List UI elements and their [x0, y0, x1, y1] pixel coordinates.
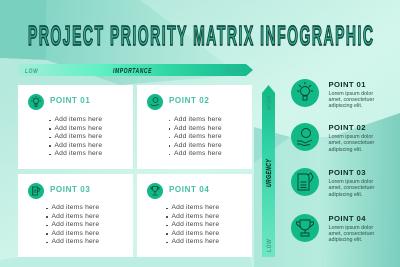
sidebar text: point 04: Lorem ipsum dolor: [328, 224, 373, 230]
item list: [166, 204, 219, 245]
icon: document large: [291, 168, 319, 196]
icon: coin in hand: [147, 94, 163, 110]
item list: Add items here: [54, 142, 102, 149]
heading: POINT 01: [50, 96, 90, 105]
sidebar text: point 03: adipiscing elit.: [328, 192, 362, 198]
sidebar text: point 01: adipiscing elit.: [328, 103, 362, 109]
sidebar text: point 02: amet, consectetuer: [328, 140, 374, 146]
item list: Add items here: [174, 133, 222, 140]
sidebar text: point 03: amet, consectetuer: [328, 185, 374, 191]
item list: Add items here: [174, 116, 222, 123]
item list: Add items here: [54, 125, 102, 132]
sidebar text: point 04: [328, 214, 374, 243]
urgency arrow: [262, 85, 275, 257]
item list: [169, 116, 222, 157]
sidebar text: point 01: [328, 80, 374, 109]
item list: Add items here: [52, 238, 99, 245]
importance arrow: LOW: [25, 68, 38, 75]
icon: trophy: [147, 183, 163, 199]
urgency arrow: HIGH: [266, 95, 273, 110]
sidebar text: point 03: [328, 168, 374, 198]
item list: Add items here: [174, 125, 222, 132]
icon: light bulb: [28, 94, 44, 110]
importance arrow: IMPORTANCE: [113, 67, 152, 75]
importance arrow: [18, 64, 253, 76]
sidebar text: point 04: amet, consectetuer: [328, 231, 374, 237]
item list: Add items here: [52, 204, 99, 211]
panel: point 01: [18, 85, 133, 169]
sidebar text: point 03: POINT 03: [328, 168, 366, 177]
item list: Add items here: [52, 230, 99, 237]
urgency arrow: URGENCY: [265, 159, 273, 187]
sidebar text: point 03: Lorem ipsum dolor: [328, 179, 373, 185]
importance arrow: HIGH: [226, 68, 241, 75]
title: PROJECT PRIORITY MATRIX INFOGRAPHIC: [28, 20, 373, 51]
heading: POINT 03: [50, 185, 90, 194]
item list: Add items here: [172, 213, 219, 220]
item list: Add items here: [172, 238, 219, 245]
sidebar text: point 02: [328, 123, 374, 153]
icon: coin in hand large: [291, 123, 319, 151]
panel: point 02: [137, 85, 252, 169]
sidebar text: point 01: Lorem ipsum dolor: [328, 90, 373, 96]
panel: point 03: [18, 174, 133, 257]
icon: light bulb large: [291, 79, 319, 107]
item list: Add items here: [174, 142, 222, 149]
sidebar text: point 02: Lorem ipsum dolor: [328, 134, 373, 140]
heading: POINT 04: [169, 185, 209, 194]
item list: Add items here: [52, 213, 99, 220]
item list: [46, 204, 99, 245]
item list: Add items here: [172, 230, 219, 237]
item list: Add items here: [174, 150, 222, 157]
item list: Add items here: [54, 133, 102, 140]
sidebar text: point 02: adipiscing elit.: [328, 147, 362, 153]
item list: Add items here: [172, 204, 219, 211]
item list: [49, 116, 102, 157]
item list: Add items here: [172, 221, 219, 228]
item list: Add items here: [54, 150, 102, 157]
item list: Add items here: [52, 221, 99, 228]
sidebar text: point 01: amet, consectetuer: [328, 97, 374, 103]
icon: document: [28, 183, 44, 199]
urgency arrow: LOW: [266, 239, 273, 252]
heading: POINT 02: [169, 96, 209, 105]
item list: Add items here: [54, 116, 102, 123]
sidebar text: point 04: POINT 04: [328, 214, 366, 222]
sidebar text: point 01: POINT 01: [328, 80, 366, 88]
icon: trophy large: [291, 214, 319, 242]
sidebar text: point 02: POINT 02: [328, 123, 366, 132]
panel: point 04: [137, 174, 252, 257]
sidebar text: point 04: adipiscing elit.: [328, 237, 362, 243]
